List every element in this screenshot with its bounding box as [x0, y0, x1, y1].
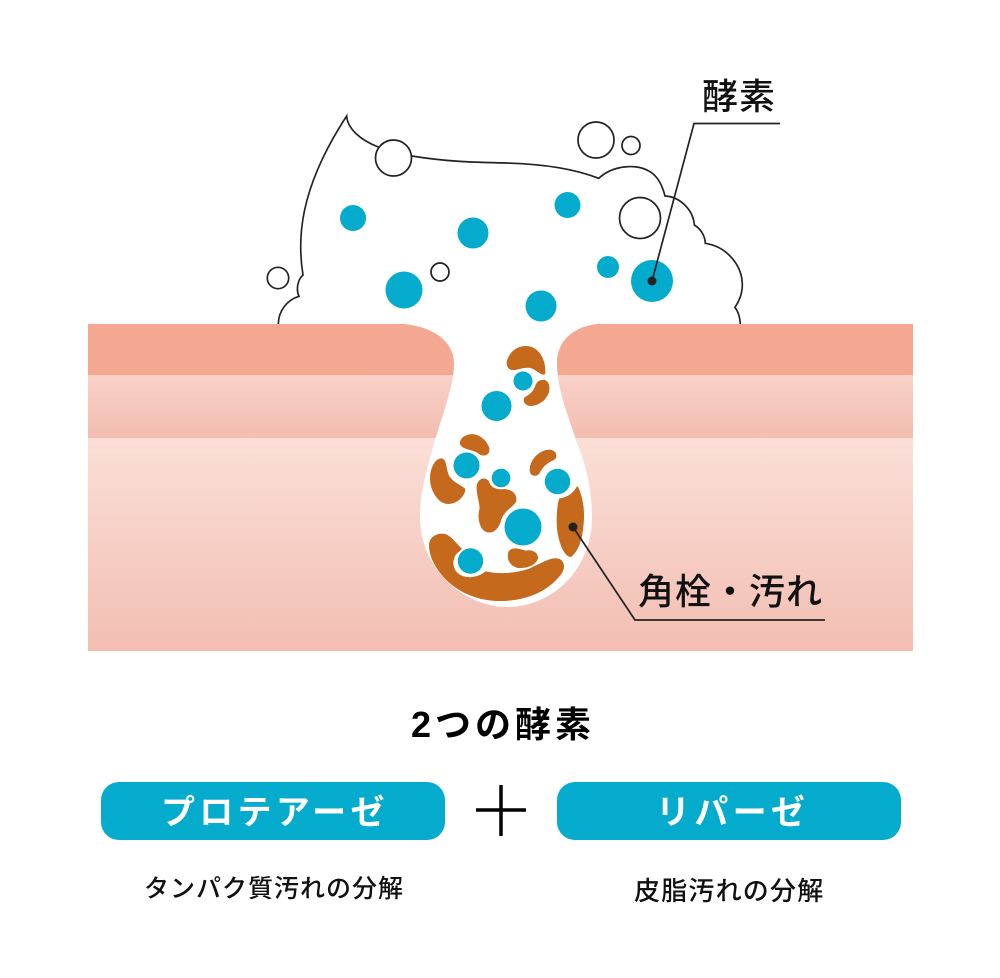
- skin layers: [88, 324, 913, 651]
- heading: 2つの酵素: [411, 704, 595, 745]
- label: enzyme: 酵素: [702, 76, 776, 117]
- caption: protein dirt breakdown: タンパク質汚れの分解: [144, 875, 404, 903]
- caption: sebum dirt breakdown: 皮脂汚れの分解: [634, 876, 824, 906]
- foam bubbles: [267, 122, 660, 289]
- enzyme dots in pore: [454, 372, 570, 574]
- leader line: plug: [568, 522, 825, 620]
- foam outline: [278, 116, 742, 324]
- sebum plugs: [430, 347, 583, 600]
- label: plug and dirt: 角栓・汚れ: [638, 571, 823, 612]
- pore: [395, 324, 605, 607]
- leader line: enzyme: [648, 124, 780, 286]
- plus sign: [476, 785, 526, 836]
- button: lipase: リパーゼ: [656, 794, 809, 832]
- enzyme dots in foam: [340, 192, 673, 322]
- button: protease: プロテアーゼ: [161, 794, 389, 832]
- button: lipase: [557, 782, 901, 840]
- button: protease: [101, 782, 445, 840]
